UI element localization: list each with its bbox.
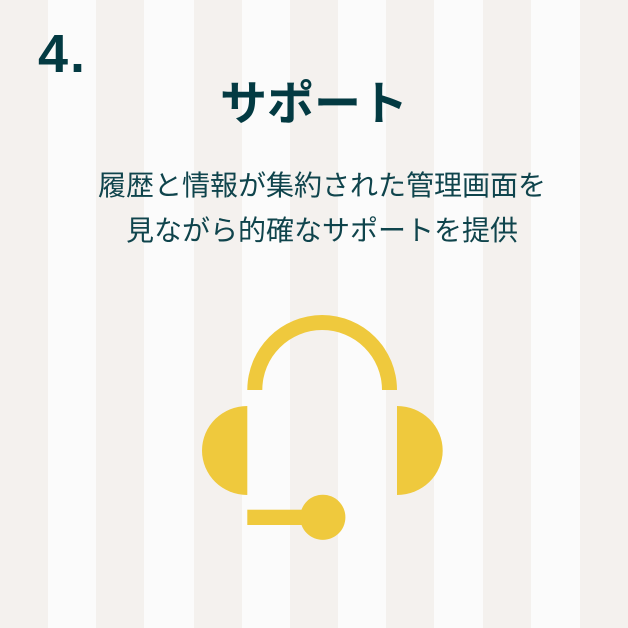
description text: 見ながら的確なサポートを提供 (126, 209, 518, 249)
left ear cup (202, 406, 247, 495)
description text: 履歴と情報が集約された管理画面を (98, 164, 546, 204)
headband (247, 315, 397, 390)
step number: 4. (38, 24, 87, 84)
right ear cup (397, 406, 443, 495)
title: サポート (220, 65, 408, 134)
description text (98, 164, 546, 249)
microphone (247, 495, 345, 540)
